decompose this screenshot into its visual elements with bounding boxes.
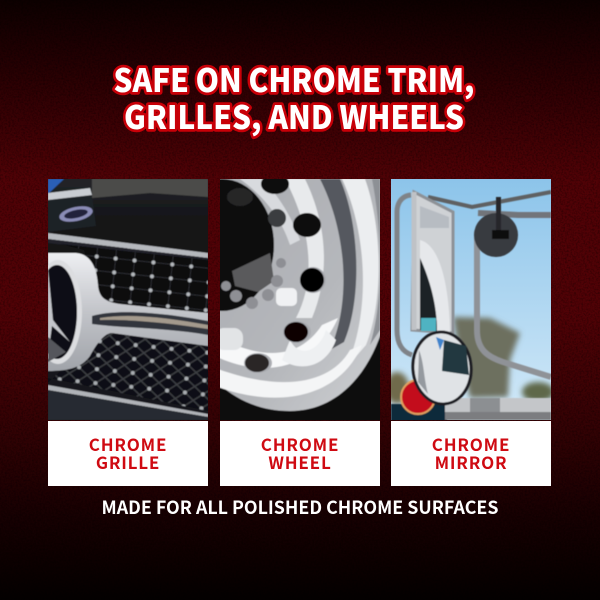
label: chrome grille: CHROME	[89, 431, 167, 456]
label box	[220, 421, 380, 486]
round black mirror	[474, 213, 518, 257]
photo: chrome grille	[48, 179, 208, 420]
label: chrome mirror: CHROME	[432, 431, 510, 456]
title: SAFE ON CHROME TRIM,	[114, 56, 474, 102]
label: chrome wheel: WHEEL	[268, 449, 332, 474]
round convex mirror	[410, 330, 474, 406]
title: GRILLES, AND WHEELS	[124, 93, 464, 139]
label: chrome grille: GRILLE	[96, 449, 160, 474]
title	[114, 56, 474, 139]
panel: chrome grille	[48, 179, 208, 486]
mirror frame arms	[397, 195, 412, 355]
label box	[391, 421, 551, 486]
photo: chrome mirror	[385, 179, 554, 422]
red light	[401, 380, 435, 414]
photo: chrome wheel	[220, 179, 380, 420]
label box	[48, 421, 208, 486]
label: chrome wheel: CHROME	[261, 431, 339, 456]
large rectangular mirror	[416, 194, 452, 332]
footer tagline: MADE FOR ALL POLISHED CHROME SURFACES	[102, 494, 498, 520]
star emblem surround and bar	[48, 253, 208, 371]
panel: chrome mirror	[385, 179, 554, 486]
panel: chrome wheel	[220, 179, 380, 486]
label: chrome mirror: MIRROR	[435, 449, 507, 474]
